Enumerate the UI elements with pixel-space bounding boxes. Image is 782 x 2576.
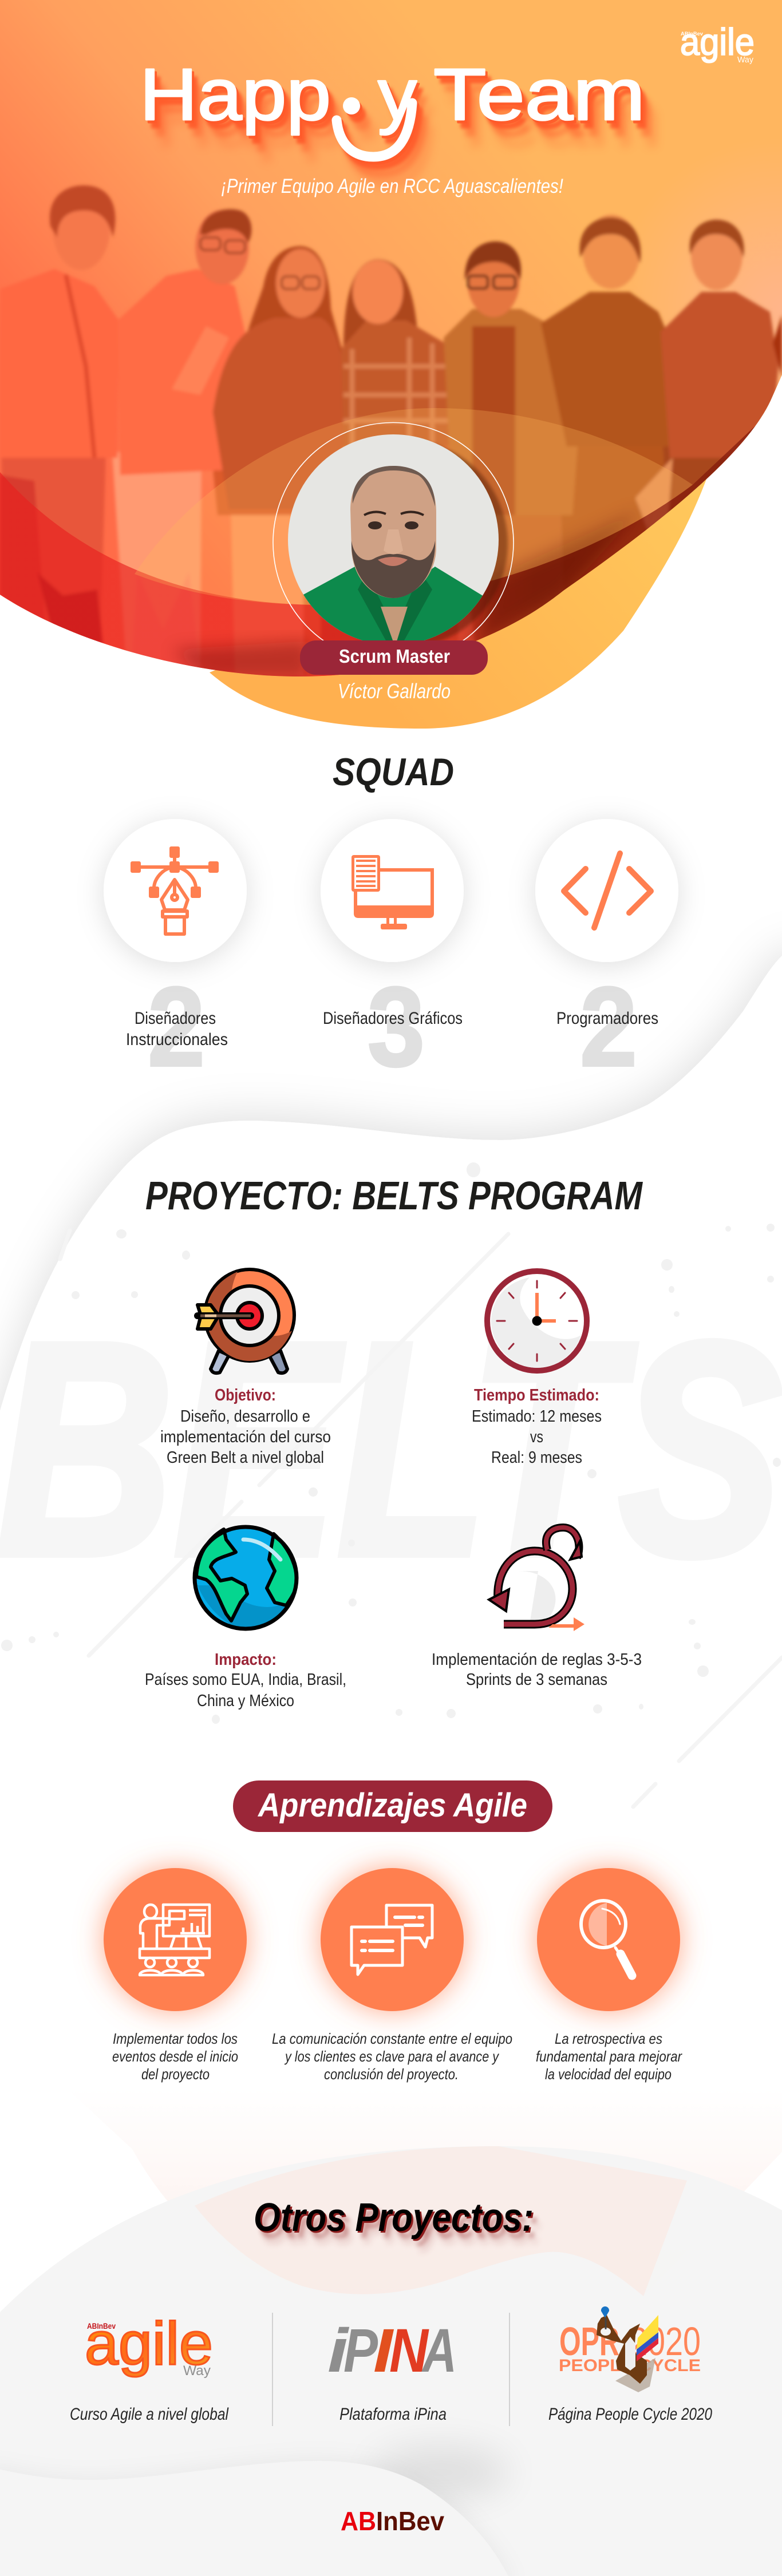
- learning 2: [272, 1868, 512, 2083]
- text: Objetivo:: [215, 1386, 276, 1404]
- panel: hero with team photo: [0, 0, 782, 687]
- heading: SQUAD: SQUAD: [333, 750, 454, 794]
- text: [536, 2030, 682, 2083]
- squad numbers: 2: [580, 964, 637, 1090]
- person 6: [541, 215, 681, 446]
- title: Happy Team with smile: Team: [433, 54, 645, 136]
- text: Países somo EUA, India, Brasil,: [145, 1671, 346, 1689]
- dark floor strip: [172, 641, 309, 678]
- icon: code brackets: [564, 853, 651, 928]
- project: iPina: [327, 2316, 457, 2424]
- logo: agile way, top right: Way: [737, 55, 753, 65]
- logo: iPINA: I: [373, 2316, 394, 2385]
- icon: sprint loop: [489, 1528, 584, 1631]
- text: eventos desde el inicio: [112, 2048, 238, 2065]
- text: Implementación de reglas 3-5-3: [432, 1651, 642, 1669]
- person 3: [213, 246, 346, 509]
- logo: iPINA: N: [389, 2316, 429, 2385]
- text: [272, 2030, 512, 2083]
- logo: AB InBev footer: AB: [341, 2506, 376, 2536]
- text: vs: [530, 1428, 543, 1446]
- squad numbers: 3: [368, 964, 425, 1090]
- person 4: [341, 259, 461, 446]
- squad numbers: [148, 964, 637, 1090]
- title: Happy Team with smile: y: [378, 54, 417, 136]
- subtitle: ¡Primer Equipo Agile en RCC Aguascalientes!: [221, 175, 563, 197]
- icon: target with arrow: [198, 1269, 294, 1373]
- caption: Plataforma iPina: [339, 2405, 447, 2424]
- white wave with shadow behind the project section: [0, 956, 782, 2576]
- text: Real: 9 meses: [491, 1449, 582, 1467]
- logo: iPINA: P: [343, 2316, 378, 2385]
- caption: Curso Agile a nivel global: [70, 2405, 229, 2424]
- project: People Cycle 2020: [548, 2306, 712, 2424]
- logo: iPINA: A: [421, 2316, 457, 2385]
- pill: Scrum Master: [300, 640, 488, 675]
- pink wave tint over grey: [195, 2146, 687, 2296]
- person 7: [661, 219, 782, 458]
- bottom wave behind logo: [0, 2461, 514, 2576]
- pants and lower bodies: [1, 457, 106, 623]
- title: Happy Team with smile: [140, 54, 645, 157]
- text: [472, 1386, 602, 1467]
- text: la velocidad del equipo: [545, 2065, 672, 2083]
- icon: pen tool: [132, 848, 217, 934]
- project block: impact: [145, 1527, 346, 1710]
- squad item: instructional designers: [104, 819, 247, 1049]
- logo: agile way: agile: [85, 2310, 213, 2377]
- text: implementación del curso: [160, 1428, 331, 1446]
- logo: agile way: Way: [183, 2363, 211, 2379]
- text: Tiempo Estimado:: [474, 1386, 599, 1404]
- caption: Página People Cycle 2020: [548, 2405, 712, 2424]
- text: conclusión del proyecto.: [324, 2065, 459, 2083]
- squad item: programmers: [535, 819, 678, 1028]
- icon: clock: [487, 1271, 587, 1371]
- team photo (stylised): [0, 185, 782, 675]
- project: agile course: [70, 2310, 229, 2424]
- logo: OPR 2020 People Cycle with Colombia map: [559, 2306, 701, 2392]
- text: Diseño, desarrollo e: [180, 1407, 310, 1426]
- squad item: graphic designers: [321, 819, 464, 1028]
- yellow hero wave: [210, 458, 708, 729]
- title: Happy Team with smile: Happ: [140, 54, 331, 136]
- concentrated shadow near footer wave: [372, 2447, 510, 2498]
- icon: magnifying glass: [581, 1901, 632, 1976]
- scrum master portrait: [273, 422, 514, 648]
- text: Implementar todos los: [113, 2030, 238, 2047]
- learning 3: [536, 1868, 682, 2083]
- text: [112, 2030, 238, 2083]
- label: Diseñadores: [135, 1009, 216, 1028]
- lower background: soft pink wave: [0, 2003, 782, 2296]
- logo: OPR 2020 People Cycle with Colombia map: 2020: [630, 2319, 701, 2364]
- icon: chat bubbles: [351, 1905, 432, 1974]
- label: Instruccionales: [126, 1030, 228, 1049]
- text: fundamental para mejorar: [536, 2048, 682, 2065]
- pill heading: Aprendizajes Agile: Aprendizajes Agile: [257, 1787, 527, 1824]
- text: La retrospectiva es: [555, 2030, 662, 2047]
- lower footer background: grey shape: [0, 2146, 782, 2576]
- name: Víctor Gallardo: [338, 679, 451, 703]
- person 5: [444, 242, 581, 515]
- icon: presenter: [140, 1905, 210, 1975]
- logo: agile way: ABInBev: [87, 2321, 116, 2330]
- red lower band of the photo: [0, 401, 782, 687]
- label: Diseñadores Gráficos: [323, 1009, 463, 1028]
- squad numbers: 2: [148, 964, 205, 1090]
- logo: iPINA: [327, 2316, 457, 2385]
- dark shadow beside portrait: [475, 509, 641, 647]
- pill heading: Aprendizajes Agile: [233, 1780, 552, 1832]
- label: Programadores: [556, 1009, 658, 1028]
- text: [432, 1651, 642, 1689]
- logo: iPINA: i: [327, 2316, 349, 2385]
- text: Green Belt a nivel global: [167, 1449, 324, 1467]
- heading: Otros Proyectos: Otros Proyectos:: [254, 2195, 534, 2239]
- logo: agile way, top right: ABInBev: [681, 31, 703, 37]
- project block: estimated time: [472, 1271, 602, 1467]
- logo: OPR 2020 People Cycle with Colombia map: OPR: [559, 2319, 619, 2364]
- project block: objective: [160, 1269, 331, 1467]
- logo: AB InBev footer: [341, 2506, 444, 2536]
- project block: sprints: [432, 1528, 642, 1689]
- text: Estimado: 12 meses: [472, 1407, 602, 1426]
- text: La comunicación constante entre el equipo: [272, 2030, 512, 2047]
- text: [145, 1651, 346, 1710]
- learning 1: [104, 1868, 247, 2083]
- text: China y México: [197, 1692, 294, 1710]
- label: [126, 1009, 228, 1049]
- faint dots and lines pattern: [1, 1162, 781, 1724]
- text: del proyecto: [141, 2065, 210, 2083]
- person 1: [0, 185, 119, 458]
- heading: project: PROYECTO: BELTS PROGRAM: [145, 1173, 643, 1218]
- text: Impacto:: [215, 1651, 277, 1669]
- logo: AB InBev footer: InBev: [376, 2506, 444, 2536]
- logo: OPR 2020 People Cycle with Colombia map: PEOPLE CYCLE: [559, 2356, 701, 2375]
- text: [160, 1386, 331, 1467]
- person 2: [117, 209, 251, 475]
- pill: Scrum Master: Scrum Master: [339, 646, 450, 667]
- icon: monitor and document: [351, 855, 434, 929]
- icon: globe: [195, 1527, 297, 1629]
- text: y los clientes es clave para el avance y: [284, 2048, 500, 2065]
- text: Sprints de 3 semanas: [466, 1671, 607, 1689]
- translucent light lobe: [135, 408, 693, 605]
- logo: agile way, top right: agile: [680, 21, 755, 63]
